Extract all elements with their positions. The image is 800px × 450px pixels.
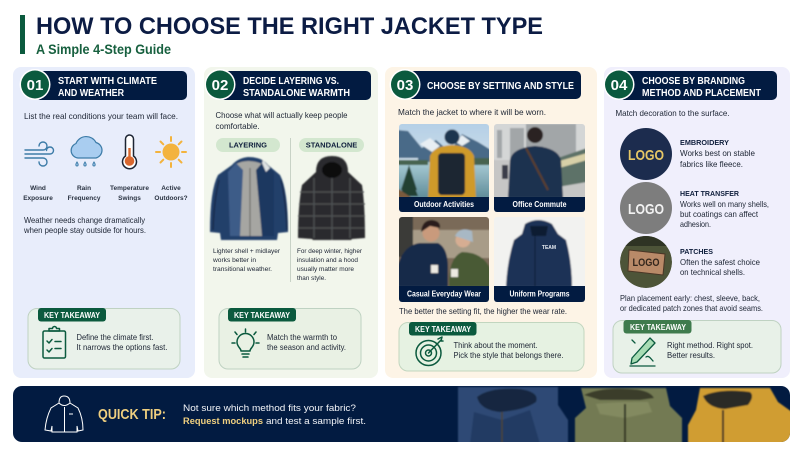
layering caption: works better in	[212, 257, 256, 264]
key takeaway 1	[28, 308, 180, 369]
panel: step 2 layering vs standalone	[204, 67, 378, 378]
jacket detail photos	[458, 387, 792, 444]
key takeaway 2: Match the warmth to	[267, 332, 337, 342]
heat transfer sample	[620, 182, 672, 234]
step 4 header: CHOOSE BY BRANDING	[642, 75, 745, 87]
icon labels: Outdoors?	[154, 195, 188, 202]
step 1 header: START WITH CLIMATE	[58, 75, 157, 87]
standalone pill	[299, 138, 364, 152]
climate note: Weather needs change dramatically	[24, 215, 146, 225]
key takeaway 3: Think about the moment.	[454, 340, 538, 350]
key takeaway 2	[219, 308, 361, 369]
patch text: PATCHES	[680, 247, 713, 256]
subtitle: A Simple 4-Step Guide	[36, 42, 171, 57]
photo card: casual everyday wear: Casual Everyday Wear	[407, 290, 481, 298]
photo card: uniform programs: Uniform Programs	[510, 290, 570, 298]
icon: sun	[156, 137, 186, 167]
key takeaway 1: Define the climate first.	[76, 332, 154, 342]
patch text: on technical shells.	[680, 267, 745, 277]
layering jacket image	[210, 157, 288, 240]
step 2 header: DECIDE LAYERING VS.	[243, 75, 339, 87]
step 2 header: 02	[212, 77, 228, 94]
intro text: Choose what will actually keep people	[216, 110, 348, 120]
step 1 header	[20, 69, 187, 100]
step 3 header	[390, 69, 581, 100]
icon labels: Rain	[77, 185, 91, 192]
icon: rain cloud	[71, 137, 102, 166]
standalone caption: For deep winter, higher	[297, 248, 363, 255]
layering caption: Lighter shell + midlayer	[213, 248, 281, 255]
standalone jacket image	[298, 156, 365, 240]
standalone caption: than style.	[297, 275, 326, 282]
layering pill	[216, 138, 280, 152]
key takeaway 4	[613, 320, 781, 373]
step 2 header	[204, 69, 371, 100]
step 4 header: 04	[611, 77, 628, 94]
quick tip label: QUICK TIP:	[98, 407, 166, 423]
quick tip message: Not sure which method fits your fabric?	[183, 403, 356, 414]
olive jacket photo	[575, 388, 682, 444]
placement note: Plan placement early: chest, sleeve, back,	[620, 293, 760, 303]
banner background	[13, 386, 790, 442]
icon: thermometer	[122, 135, 136, 169]
layering caption: transitional weather.	[213, 266, 272, 273]
panel 4 background	[604, 67, 790, 378]
panel: step 1 climate and weather	[13, 67, 195, 378]
icon: light bulb	[232, 329, 259, 357]
icon: target	[416, 337, 443, 366]
placement note: or dedicated patch zones that avoid seams.	[620, 303, 763, 313]
intro text: Match the jacket to where it will be worn.	[398, 107, 546, 117]
photo card: uniform programs: TEAM	[542, 245, 556, 251]
icon labels: Wind	[30, 185, 46, 192]
key takeaway 4: Right method. Right spot.	[667, 340, 753, 350]
icon labels: Exposure	[23, 195, 53, 202]
photo card: office commute	[492, 122, 587, 212]
step 1 header: AND WEATHER	[58, 87, 124, 99]
embroidery sample	[620, 128, 672, 180]
standalone caption: insulation and a hood	[297, 257, 358, 264]
key takeaway 3	[399, 322, 584, 371]
title block	[20, 13, 543, 57]
embroidery text	[680, 138, 755, 169]
icon labels: Swings	[118, 195, 141, 202]
step 4 header: METHOD AND PLACEMENT	[642, 87, 761, 99]
key takeaway 4: KEY TAKEAWAY	[630, 323, 686, 332]
navy jacket photo	[458, 387, 568, 444]
heat transfer text: Works well on many shells,	[680, 199, 769, 209]
divider	[290, 138, 291, 282]
embroidery text: EMBROIDERY	[680, 138, 729, 147]
photo card: outdoor activities: Outdoor Activities	[414, 200, 474, 209]
patch text	[680, 247, 760, 277]
placement note	[620, 293, 763, 313]
heat transfer text: HEAT TRANSFER	[680, 189, 740, 198]
step 3 header: 03	[397, 77, 413, 94]
key takeaway 2: the season and activity.	[267, 342, 346, 352]
quick tip message	[183, 403, 366, 427]
icon labels: Active	[161, 185, 181, 192]
quick tip banner	[13, 386, 792, 444]
quick tip message: Request mockups	[183, 416, 263, 427]
climate note	[23, 215, 146, 235]
patch text: Often the safest choice	[680, 257, 760, 267]
icon: jacket outline	[45, 396, 83, 432]
step 2 header: STANDALONE WARMTH	[243, 87, 350, 99]
heat transfer sample: LOGO	[628, 201, 664, 218]
heat transfer text	[680, 189, 769, 229]
panel: step 3 setting and style	[385, 67, 597, 378]
icon: wind	[25, 142, 54, 166]
photo card: casual everyday wear	[397, 215, 491, 302]
intro text	[216, 110, 348, 131]
intro text: List the real conditions your team will face.	[24, 111, 178, 121]
embroidery sample: LOGO	[628, 147, 664, 164]
photo card: outdoor activities	[397, 122, 491, 212]
panel 3 background	[385, 67, 597, 378]
standalone pill: STANDALONE	[306, 140, 357, 150]
patch sample: LOGO	[632, 257, 660, 269]
quick tip message: and test a sample first.	[266, 416, 366, 427]
panel 1 background	[13, 67, 195, 378]
heat transfer text: but coatings can affect	[680, 209, 759, 219]
key takeaway 2: KEY TAKEAWAY	[234, 311, 290, 320]
intro text: Match decoration to the surface.	[616, 108, 730, 118]
step 1 header: 01	[27, 77, 43, 94]
key takeaway 3: Pick the style that belongs there.	[454, 350, 564, 360]
climate note: when people stay outside for hours.	[23, 225, 146, 235]
intro text: comfortable.	[216, 121, 260, 131]
standalone caption: usually matter more	[297, 266, 354, 273]
key takeaway 1: It narrows the options fast.	[76, 342, 168, 352]
key takeaway 4: Better results.	[667, 350, 715, 360]
heat transfer text: adhesion.	[680, 219, 711, 229]
title accent bar	[20, 15, 25, 54]
embroidery text: fabrics like fleece.	[680, 159, 743, 169]
patch sample	[620, 236, 672, 288]
gold jacket photo	[688, 388, 792, 444]
layering caption	[212, 248, 281, 273]
icon: pencil	[630, 338, 655, 366]
key takeaway 1: KEY TAKEAWAY	[44, 311, 100, 320]
panel 2 background	[204, 67, 378, 378]
icon labels: Frequency	[68, 195, 101, 202]
standalone caption	[297, 248, 363, 282]
step 3 header: CHOOSE BY SETTING AND STYLE	[427, 80, 574, 92]
step 4 header	[604, 69, 777, 100]
setting note: The better the setting fit, the higher the wear rate.	[399, 306, 567, 316]
title: HOW TO CHOOSE THE RIGHT JACKET TYPE	[36, 13, 543, 40]
embroidery text: Works best on stable	[680, 148, 755, 158]
photo card: uniform programs	[492, 215, 587, 302]
photo card: office commute: Office Commute	[512, 200, 567, 209]
layering pill: LAYERING	[229, 140, 267, 150]
key takeaway 3: KEY TAKEAWAY	[415, 325, 471, 334]
icon labels	[23, 185, 188, 202]
icon: clipboard	[43, 326, 66, 358]
icon labels: Temperature	[110, 185, 149, 192]
panel: step 4 branding method and placement	[604, 67, 790, 378]
